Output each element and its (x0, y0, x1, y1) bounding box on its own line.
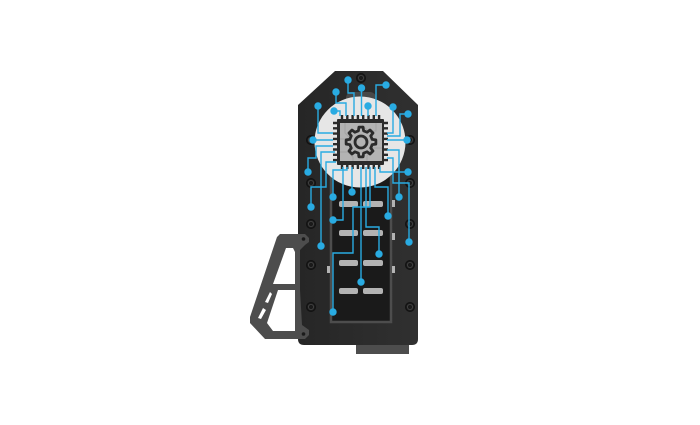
chip face (340, 123, 382, 161)
upper recess (346, 92, 376, 104)
lower recessed panel (331, 168, 391, 322)
side clips (327, 200, 395, 273)
circuit nodes (304, 76, 413, 316)
screw inner rings (308, 75, 413, 310)
icon: gear (346, 127, 376, 157)
screws (306, 74, 414, 312)
circuit traces (308, 80, 409, 312)
bottom tab (356, 340, 409, 354)
mounting bracket (250, 234, 309, 339)
white circle (314, 96, 406, 188)
bracket screws (302, 237, 305, 336)
chip body (337, 119, 384, 165)
chip pins (333, 115, 388, 169)
device body (298, 71, 418, 345)
chip (333, 115, 388, 169)
chip face traces (340, 123, 382, 161)
slot pills (339, 201, 383, 294)
